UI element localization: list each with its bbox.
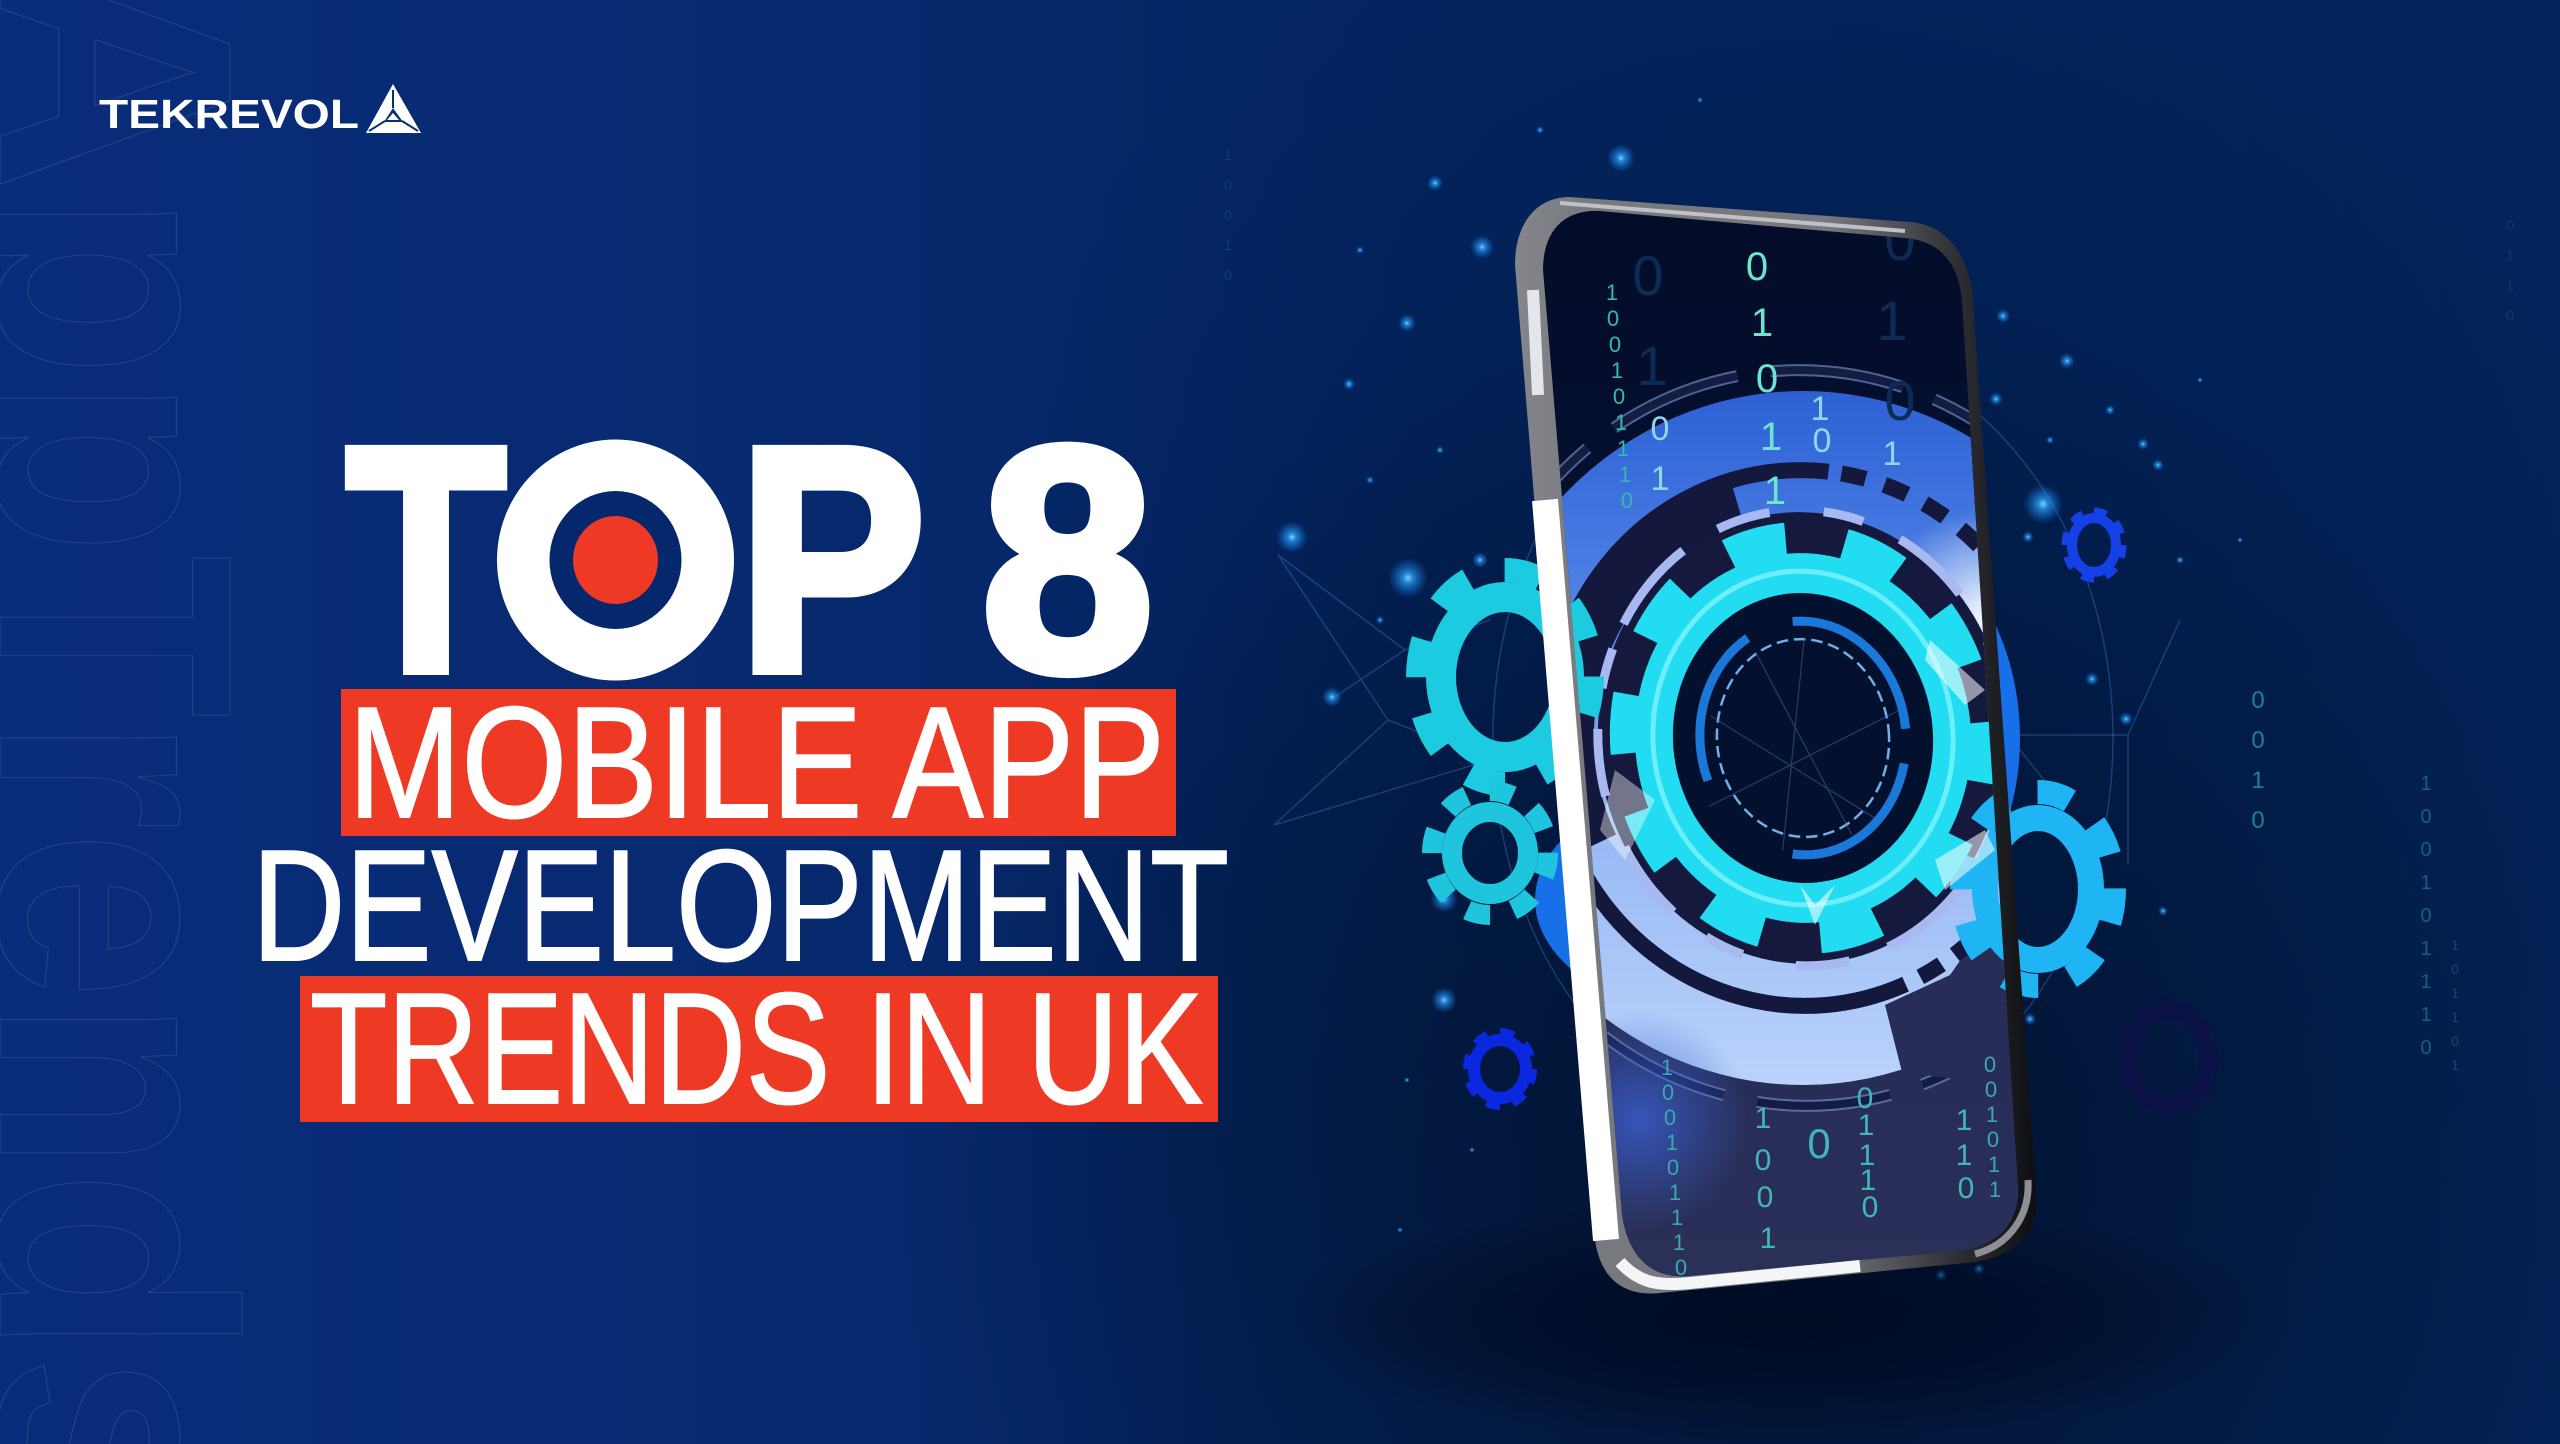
binary on screen: 0 bbox=[1884, 209, 1916, 272]
binary on screen: 0 bbox=[1857, 1082, 1873, 1115]
binary on screen: 1 bbox=[1661, 1055, 1673, 1080]
background binary columns bbox=[1224, 147, 2514, 1073]
binary on screen: 1 bbox=[1611, 358, 1623, 383]
background binary columns: 0 bbox=[2420, 839, 2432, 861]
binary on screen: 1 bbox=[1619, 462, 1631, 487]
background binary columns: 1 bbox=[2420, 971, 2432, 993]
binary on screen: 0 bbox=[1987, 1127, 1999, 1152]
concentric rings bbox=[1572, 462, 2000, 1014]
binary on screen: 1 bbox=[1811, 390, 1829, 428]
title: TOP 8: T bbox=[346, 380, 506, 738]
binary on screen: 1 bbox=[1768, 525, 1790, 569]
binary on screen: 1 bbox=[1617, 436, 1629, 461]
phone shadow bbox=[1260, 1200, 2300, 1440]
background binary columns: 1 bbox=[2451, 937, 2459, 953]
background binary columns: 1 bbox=[2506, 247, 2514, 263]
binary on screen: 1 bbox=[1755, 1102, 1771, 1135]
background binary columns: 0 bbox=[2420, 806, 2432, 828]
binary on screen: 0 bbox=[1813, 422, 1831, 460]
icon: main gear bbox=[1609, 523, 1997, 953]
binary on screen: 0 bbox=[1609, 332, 1621, 357]
title: TOP 8 bbox=[346, 380, 1154, 738]
binary on screen: 0 bbox=[1757, 1181, 1773, 1214]
target mark in the letter O bbox=[524, 466, 708, 654]
binary on screen: 1 bbox=[1876, 289, 1908, 352]
binary on screen: 1 bbox=[1615, 410, 1627, 435]
banner: MOBILE APP: MOBILE APP bbox=[348, 675, 1165, 851]
binary on screen: 1 bbox=[1751, 301, 1773, 345]
particles bbox=[1276, 97, 2243, 1281]
binary on screen: 0 bbox=[1884, 369, 1916, 432]
background binary columns: 1 bbox=[2420, 773, 2432, 795]
background binary columns: 0 bbox=[1224, 177, 1232, 193]
background binary columns: 0 bbox=[2251, 807, 2265, 834]
background binary columns: 0 bbox=[2420, 1037, 2432, 1059]
gear centre bbox=[1661, 582, 1945, 894]
icon: small blue gear lower left bbox=[1467, 1032, 1533, 1106]
logo: TEKREVOL: TEKREVOL bbox=[99, 91, 359, 137]
binary on screen: 1 bbox=[1956, 1104, 1972, 1137]
background binary columns: 0 bbox=[2420, 905, 2432, 927]
background binary columns: 1 bbox=[2420, 938, 2432, 960]
binary on screen: 0 bbox=[1632, 244, 1664, 307]
phone frame bbox=[1515, 197, 2036, 1293]
heading: DEVELOPMENT: DEVELOPMENT bbox=[252, 818, 1229, 994]
binary on screen: 0 bbox=[1607, 306, 1619, 331]
background binary columns: 1 bbox=[2251, 767, 2265, 794]
background binary columns: 1 bbox=[1224, 147, 1232, 163]
binary on screen: 0 bbox=[1756, 357, 1778, 401]
binary on screen: 0 bbox=[1675, 1255, 1687, 1280]
binary on screen: 1 bbox=[1989, 1177, 2001, 1202]
binary on screen: 1 bbox=[1859, 1139, 1875, 1172]
frame highlights bbox=[1533, 203, 2028, 1284]
gear highlights bbox=[1600, 640, 1995, 925]
binary on screen: 1 bbox=[1764, 469, 1786, 513]
binary on screen: 0 bbox=[1746, 245, 1768, 289]
binary on screen: 1 bbox=[1666, 1130, 1678, 1155]
binary on screen: 0 bbox=[1651, 410, 1669, 448]
background binary columns: 0 bbox=[2451, 961, 2459, 977]
binary on screen: 1 bbox=[1986, 1102, 1998, 1127]
binary on screen: 1 bbox=[1860, 1164, 1876, 1197]
icon: logo triangle bbox=[366, 84, 421, 133]
binary on screen: 1 bbox=[1956, 1139, 1972, 1172]
background binary columns: 0 bbox=[2251, 687, 2265, 714]
disc cut lower right bbox=[1885, 947, 2009, 1078]
network lines bbox=[1274, 345, 2180, 1131]
binary on screen: 0 bbox=[1755, 1144, 1771, 1177]
icon: small blue gear right bbox=[2066, 512, 2122, 578]
screen graphic bbox=[1560, 236, 2009, 1275]
phone screen bbox=[1543, 211, 2018, 1276]
background binary columns: 0 bbox=[2506, 307, 2514, 323]
background binary columns: 1 bbox=[2506, 277, 2514, 293]
binary on screen: 0 bbox=[1958, 1172, 1974, 1205]
background binary columns: 0 bbox=[2451, 1033, 2459, 1049]
background binary columns: 1 bbox=[2420, 872, 2432, 894]
binary on screen: 0 bbox=[1613, 384, 1625, 409]
background binary columns: 0 bbox=[2251, 727, 2265, 754]
title: TOP 8: O bbox=[495, 391, 735, 727]
icon: small left gear bbox=[1432, 791, 1548, 915]
background binary columns: 0 bbox=[1224, 207, 1232, 223]
light blue disc bbox=[1562, 391, 2007, 1085]
binary on screen: 1 bbox=[1606, 280, 1618, 305]
binary on screen: 1 bbox=[1883, 435, 1901, 473]
icon: right gear bbox=[1962, 792, 2114, 986]
binary on screen: 0 bbox=[1664, 1105, 1676, 1130]
binary on screen: 1 bbox=[1760, 415, 1782, 459]
binary on screen: 0 bbox=[1984, 1052, 1996, 1077]
icon: dark gear right bbox=[2121, 1001, 2215, 1115]
banner: TRENDS IN UK: TRENDS IN UK bbox=[310, 961, 1203, 1137]
binary on screen: 0 bbox=[1621, 488, 1633, 513]
binary on screen: 0 bbox=[1662, 1080, 1674, 1105]
background binary columns: 0 bbox=[1224, 267, 1232, 283]
title: TOP 8: 8 bbox=[981, 380, 1154, 738]
binary on screen: 0 bbox=[1985, 1077, 1997, 1102]
binary on screen: 1 bbox=[1671, 1205, 1683, 1230]
background binary columns: 1 bbox=[2451, 1057, 2459, 1073]
background binary columns: 1 bbox=[2420, 1004, 2432, 1026]
background binary columns: 1 bbox=[2451, 985, 2459, 1001]
binary on screen: 1 bbox=[1760, 1222, 1776, 1255]
background binary columns: 1 bbox=[1224, 237, 1232, 253]
binary on screen: 1 bbox=[1651, 460, 1669, 498]
binary on screen: 1 bbox=[1636, 334, 1668, 397]
binary on screen: 0 bbox=[1862, 1191, 1878, 1224]
outer dashed ring bbox=[1560, 364, 2009, 1112]
title: TOP 8: P bbox=[738, 380, 926, 738]
binary on screen: 1 bbox=[1669, 1180, 1681, 1205]
background binary columns: 0 bbox=[2506, 217, 2514, 233]
background binary columns: 1 bbox=[2451, 1009, 2459, 1025]
blue disc behind phone bbox=[1535, 508, 2020, 1030]
icon: large left gear bbox=[1418, 570, 1592, 784]
binary on screen bbox=[1606, 209, 2001, 1280]
binary on screen: 0 bbox=[1807, 1120, 1831, 1167]
background watermark: AppTrends bbox=[0, 0, 242, 1444]
binary on screen: 0 bbox=[1667, 1155, 1679, 1180]
binary on screen: 1 bbox=[1988, 1152, 2000, 1177]
binary on screen: 1 bbox=[1858, 1109, 1874, 1142]
logo: TEKREVOL bbox=[99, 84, 421, 137]
binary on screen: 1 bbox=[1673, 1230, 1685, 1255]
